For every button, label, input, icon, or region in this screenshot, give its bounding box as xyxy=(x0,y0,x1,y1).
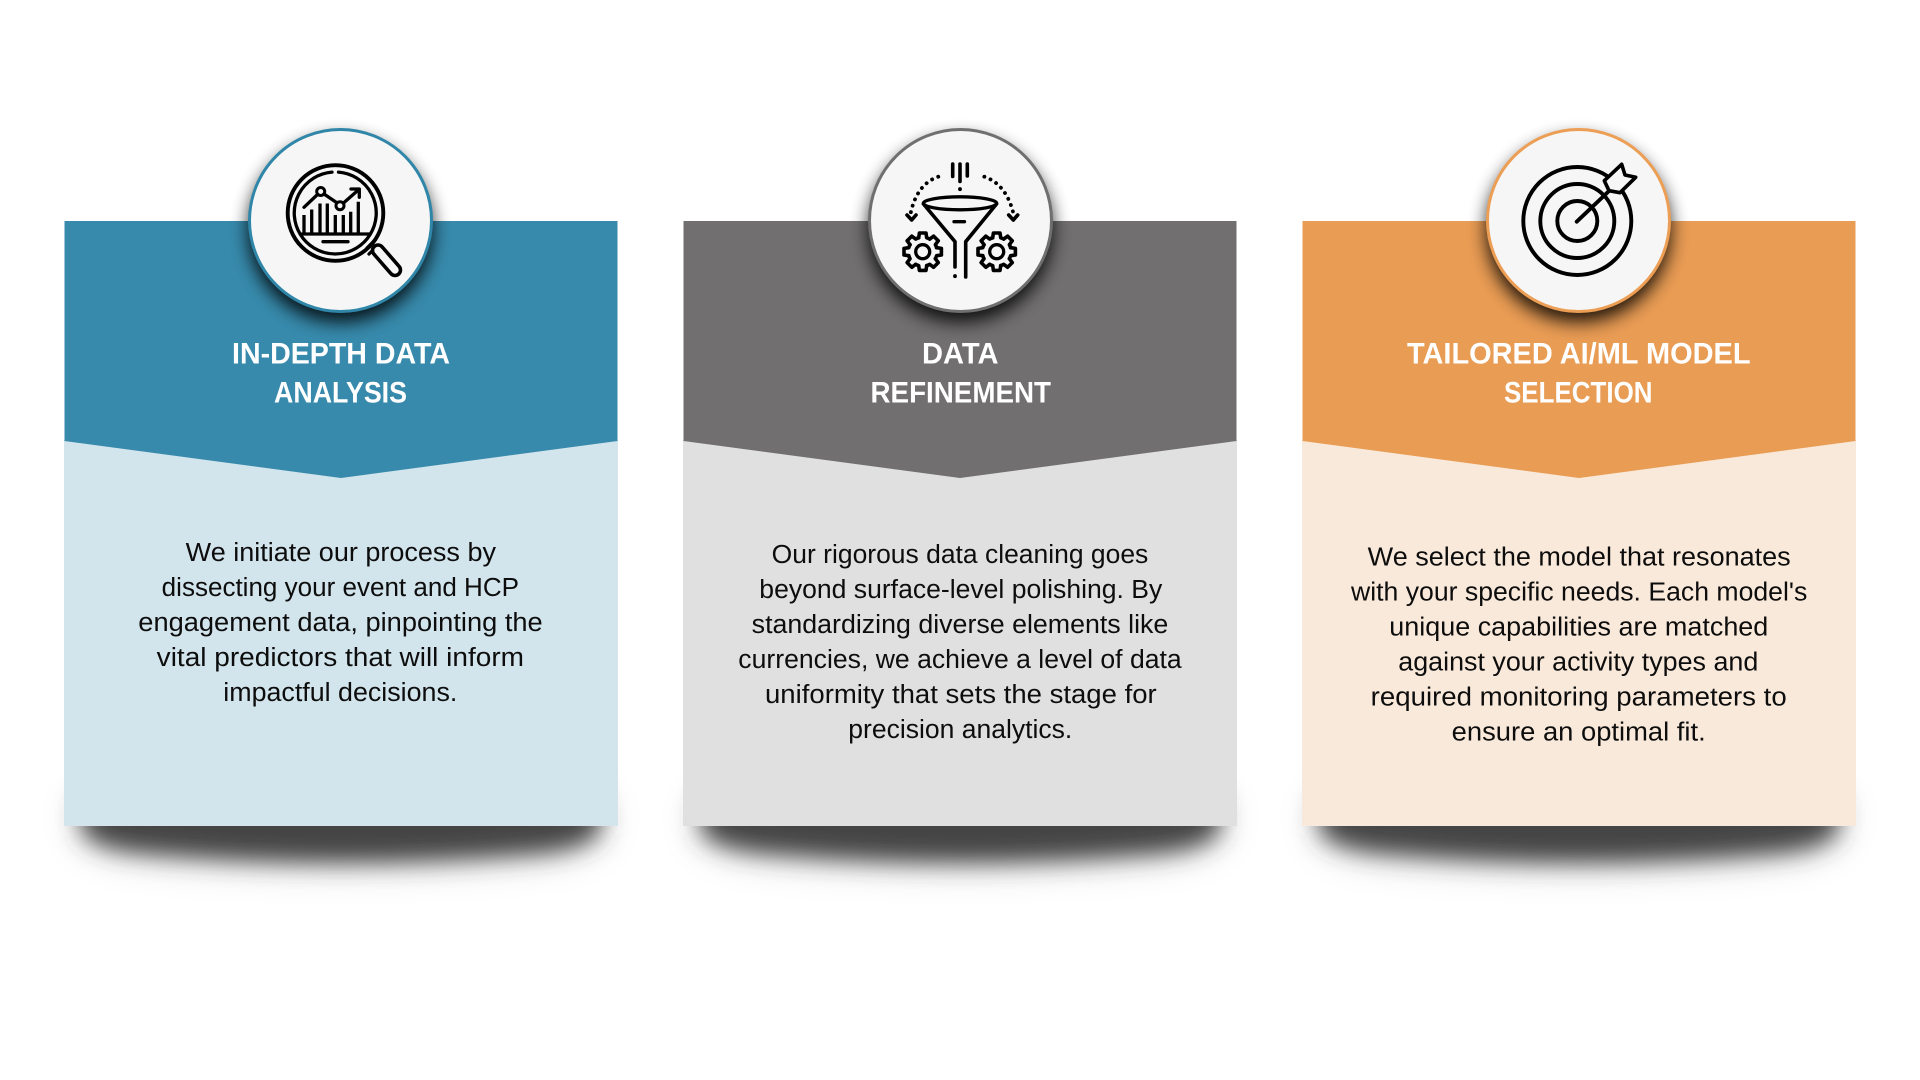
floor shadow: panel 3 xyxy=(1320,800,1838,862)
floor shadow: panel 2 xyxy=(702,800,1220,862)
text block: panel 1 description: We initiate our process by xyxy=(186,539,496,567)
text block: panel 1 description: dissecting your event and HCP xyxy=(162,574,519,602)
icon: magnifying glass over chart xyxy=(288,165,395,270)
text block: panel 2 description: Our rigorous data cleaning goes xyxy=(772,541,1148,569)
text block: panel 2 description: currencies, we achieve a level of data xyxy=(738,646,1183,674)
header banner: panel 3 xyxy=(1302,221,1856,478)
heading: tailored ai/ml model selection xyxy=(1407,338,1750,410)
circle badge: panel 2 xyxy=(868,130,1052,322)
panel: in-depth data analysis xyxy=(64,130,618,862)
circle badge: panel 3 xyxy=(1486,130,1670,322)
heading: in-depth data analysis: ANALYSIS xyxy=(274,377,407,410)
icon: funnel with gears xyxy=(904,164,1018,277)
header banner: panel 1 xyxy=(64,221,618,478)
text block: panel 1 description: impactful decisions. xyxy=(223,679,457,707)
text block: panel 2 description: precision analytics. xyxy=(848,716,1072,744)
text block: panel 3 description xyxy=(1350,544,1807,747)
panel: tailored ai/ml model selection xyxy=(1302,130,1856,862)
heading: tailored ai/ml model selection: TAILORED AI/ML MODEL xyxy=(1407,338,1750,371)
panel: data refinement xyxy=(683,130,1237,862)
heading: tailored ai/ml model selection: SELECTION xyxy=(1504,377,1652,410)
text block: panel 2 description: beyond surface-level polishing. By xyxy=(759,576,1163,604)
heading: data refinement: DATA xyxy=(922,338,998,371)
text block: panel 1 description: vital predictors that will inform xyxy=(157,644,524,672)
text block: panel 3 description: with your specific needs. Each model's xyxy=(1350,579,1807,607)
circle badge: panel 1 xyxy=(248,130,432,322)
heading: data refinement: REFINEMENT xyxy=(870,377,1051,410)
heading: in-depth data analysis: IN-DEPTH DATA xyxy=(232,338,450,371)
text block: panel 2 description: standardizing diverse elements like xyxy=(752,611,1168,639)
text block: panel 1 description: engagement data, pinpointing the xyxy=(138,609,543,637)
text block: panel 3 description: ensure an optimal fit. xyxy=(1452,719,1706,747)
icon: target with arrow xyxy=(1523,164,1636,275)
text block: panel 3 description: We select the model that resonates xyxy=(1368,544,1791,572)
heading: in-depth data analysis xyxy=(232,338,450,410)
text block: panel 3 description: unique capabilities are matched xyxy=(1389,614,1768,642)
text block: panel 2 description: uniformity that sets the stage for xyxy=(765,681,1157,709)
text block: panel 3 description: required monitoring parameters to xyxy=(1371,684,1787,712)
body background: panel 2 xyxy=(683,440,1237,826)
text block: panel 3 description: against your activity types and xyxy=(1398,649,1758,677)
text block: panel 1 description xyxy=(138,539,543,707)
body background: panel 3 xyxy=(1302,440,1856,826)
header banner: panel 2 xyxy=(684,221,1236,478)
body background: panel 1 xyxy=(64,440,618,826)
heading: data refinement xyxy=(870,338,1051,410)
floor shadow: panel 1 xyxy=(82,800,600,862)
text block: panel 2 description xyxy=(738,541,1183,744)
